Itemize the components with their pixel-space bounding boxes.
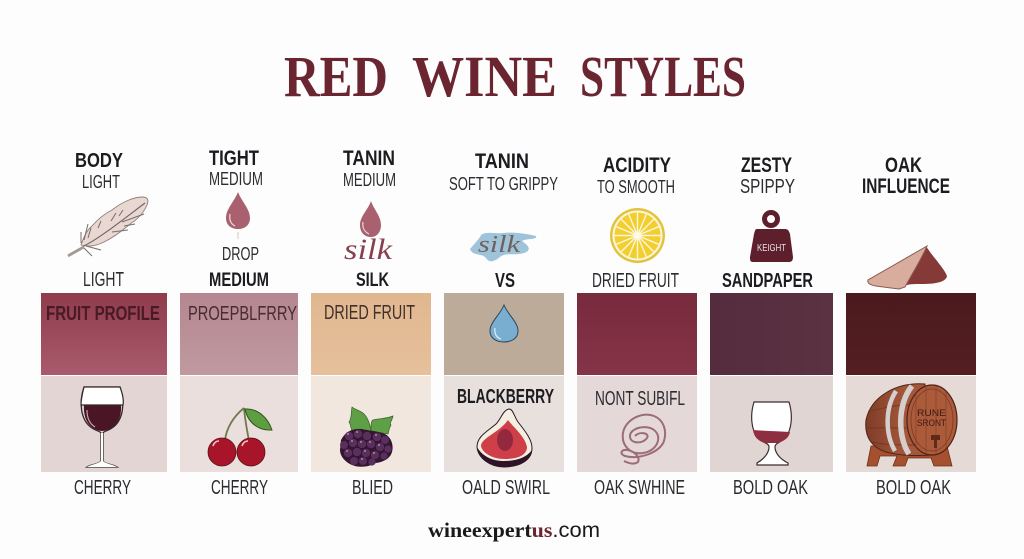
column 6: zesty: [710, 154, 833, 499]
label: medium: MEDIUM: [209, 270, 269, 291]
icon: wood shaving pile: [868, 246, 947, 289]
label: blied: BLIED: [352, 477, 393, 499]
text: nont subifl: NONT SUBIFL: [595, 388, 685, 410]
icon: silk splash: silk: [478, 232, 520, 258]
icon: silk splash: [470, 232, 536, 261]
title: WINE: [412, 44, 557, 109]
label: light: LIGHT: [83, 269, 124, 291]
label: sandpaper: SANDPAPER: [722, 270, 813, 292]
lower panel: [846, 376, 976, 472]
icon: wine glass: [81, 387, 123, 467]
column 7: oak influence: [846, 154, 976, 499]
icon: wine drop: [360, 201, 381, 237]
lower panel: [577, 376, 697, 472]
heading: body: BODY: [75, 150, 124, 172]
top band: [710, 293, 833, 375]
label: blackberry: BLACKBERRY: [457, 386, 554, 408]
subheading: medium: MEDIUM: [343, 170, 396, 190]
subheading: to smooth: TO SMOOTH: [597, 177, 675, 197]
column 1: body: [41, 150, 167, 499]
top band: [180, 293, 298, 375]
icon: weight: KEIGHT: [757, 242, 786, 254]
script word: silk: silk: [344, 233, 393, 266]
subheading: medium: MEDIUM: [209, 169, 263, 189]
heading: tanin: TANIN: [475, 150, 529, 173]
band label: PROEPBLFRRY: [188, 303, 297, 325]
heading: tight: TIGHT: [209, 147, 259, 170]
top band: [444, 293, 564, 375]
heading: oak: OAK: [885, 154, 922, 177]
label: vs: VS: [495, 270, 515, 292]
top band: [577, 293, 697, 375]
icon: oak barrel: SRONT: [917, 418, 946, 428]
heading: zesty: ZESTY: [741, 154, 792, 177]
icon: wine drop: [226, 192, 250, 239]
label: silk: SILK: [356, 270, 389, 291]
lower panel: [710, 376, 833, 472]
lower panel: [180, 376, 298, 472]
label: bold oak: BOLD OAK: [876, 477, 951, 499]
top band: [311, 293, 431, 375]
label: dried fruit: DRIED FRUIT: [592, 270, 679, 292]
label: cherry: CHERRY: [211, 477, 268, 499]
label: cherry: CHERRY: [74, 477, 131, 499]
icon: water drop: [490, 305, 518, 342]
lower panel: [41, 376, 167, 472]
label: bold oak: BOLD OAK: [733, 477, 808, 499]
top band: [41, 293, 167, 375]
label: oak swhine: OAK SWHINE: [594, 477, 685, 499]
icon: fig: [477, 409, 532, 467]
icon: feather: [68, 197, 148, 256]
lower panel: [444, 376, 564, 472]
band label: dried fruit: DRIED FRUIT: [324, 302, 415, 324]
icon: blackberry: [340, 407, 393, 467]
band label: fruit profile: FRUIT PROFILE: [46, 303, 160, 325]
column 2: tight: [180, 147, 298, 499]
icon: wine glass: [752, 402, 791, 465]
lower panel: [311, 376, 431, 472]
icon: cherries: [208, 408, 272, 466]
icon: oak barrel: [866, 384, 957, 466]
title: STYLES: [580, 44, 746, 109]
label: oald swirl: OALD SWIRL: [462, 477, 550, 499]
subheading: soft to grippy: SOFT TO GRIPPY: [449, 174, 558, 194]
subheading: light: LIGHT: [82, 172, 120, 192]
icon: weight: [750, 212, 793, 262]
heading: tanin: TANIN: [343, 147, 395, 170]
top band: [846, 293, 976, 375]
column 4: tanin soft to grippy: [444, 150, 564, 499]
footer: website: wineexpertus.com: [428, 518, 600, 542]
column 5: acidity: [577, 154, 697, 499]
heading: influence: INFLUENCE: [862, 175, 950, 198]
column 3: tanin: [311, 147, 431, 499]
heading: acidity: ACIDITY: [603, 154, 671, 177]
title: [284, 44, 746, 109]
icon: swirl: [621, 415, 665, 464]
icon: lemon slice: [610, 208, 665, 263]
subheading: spippy: SPIPPY: [740, 176, 795, 198]
label: drop: DROP: [222, 244, 259, 264]
icon: oak barrel: RUNE: [917, 408, 946, 418]
title: RED: [284, 44, 388, 109]
